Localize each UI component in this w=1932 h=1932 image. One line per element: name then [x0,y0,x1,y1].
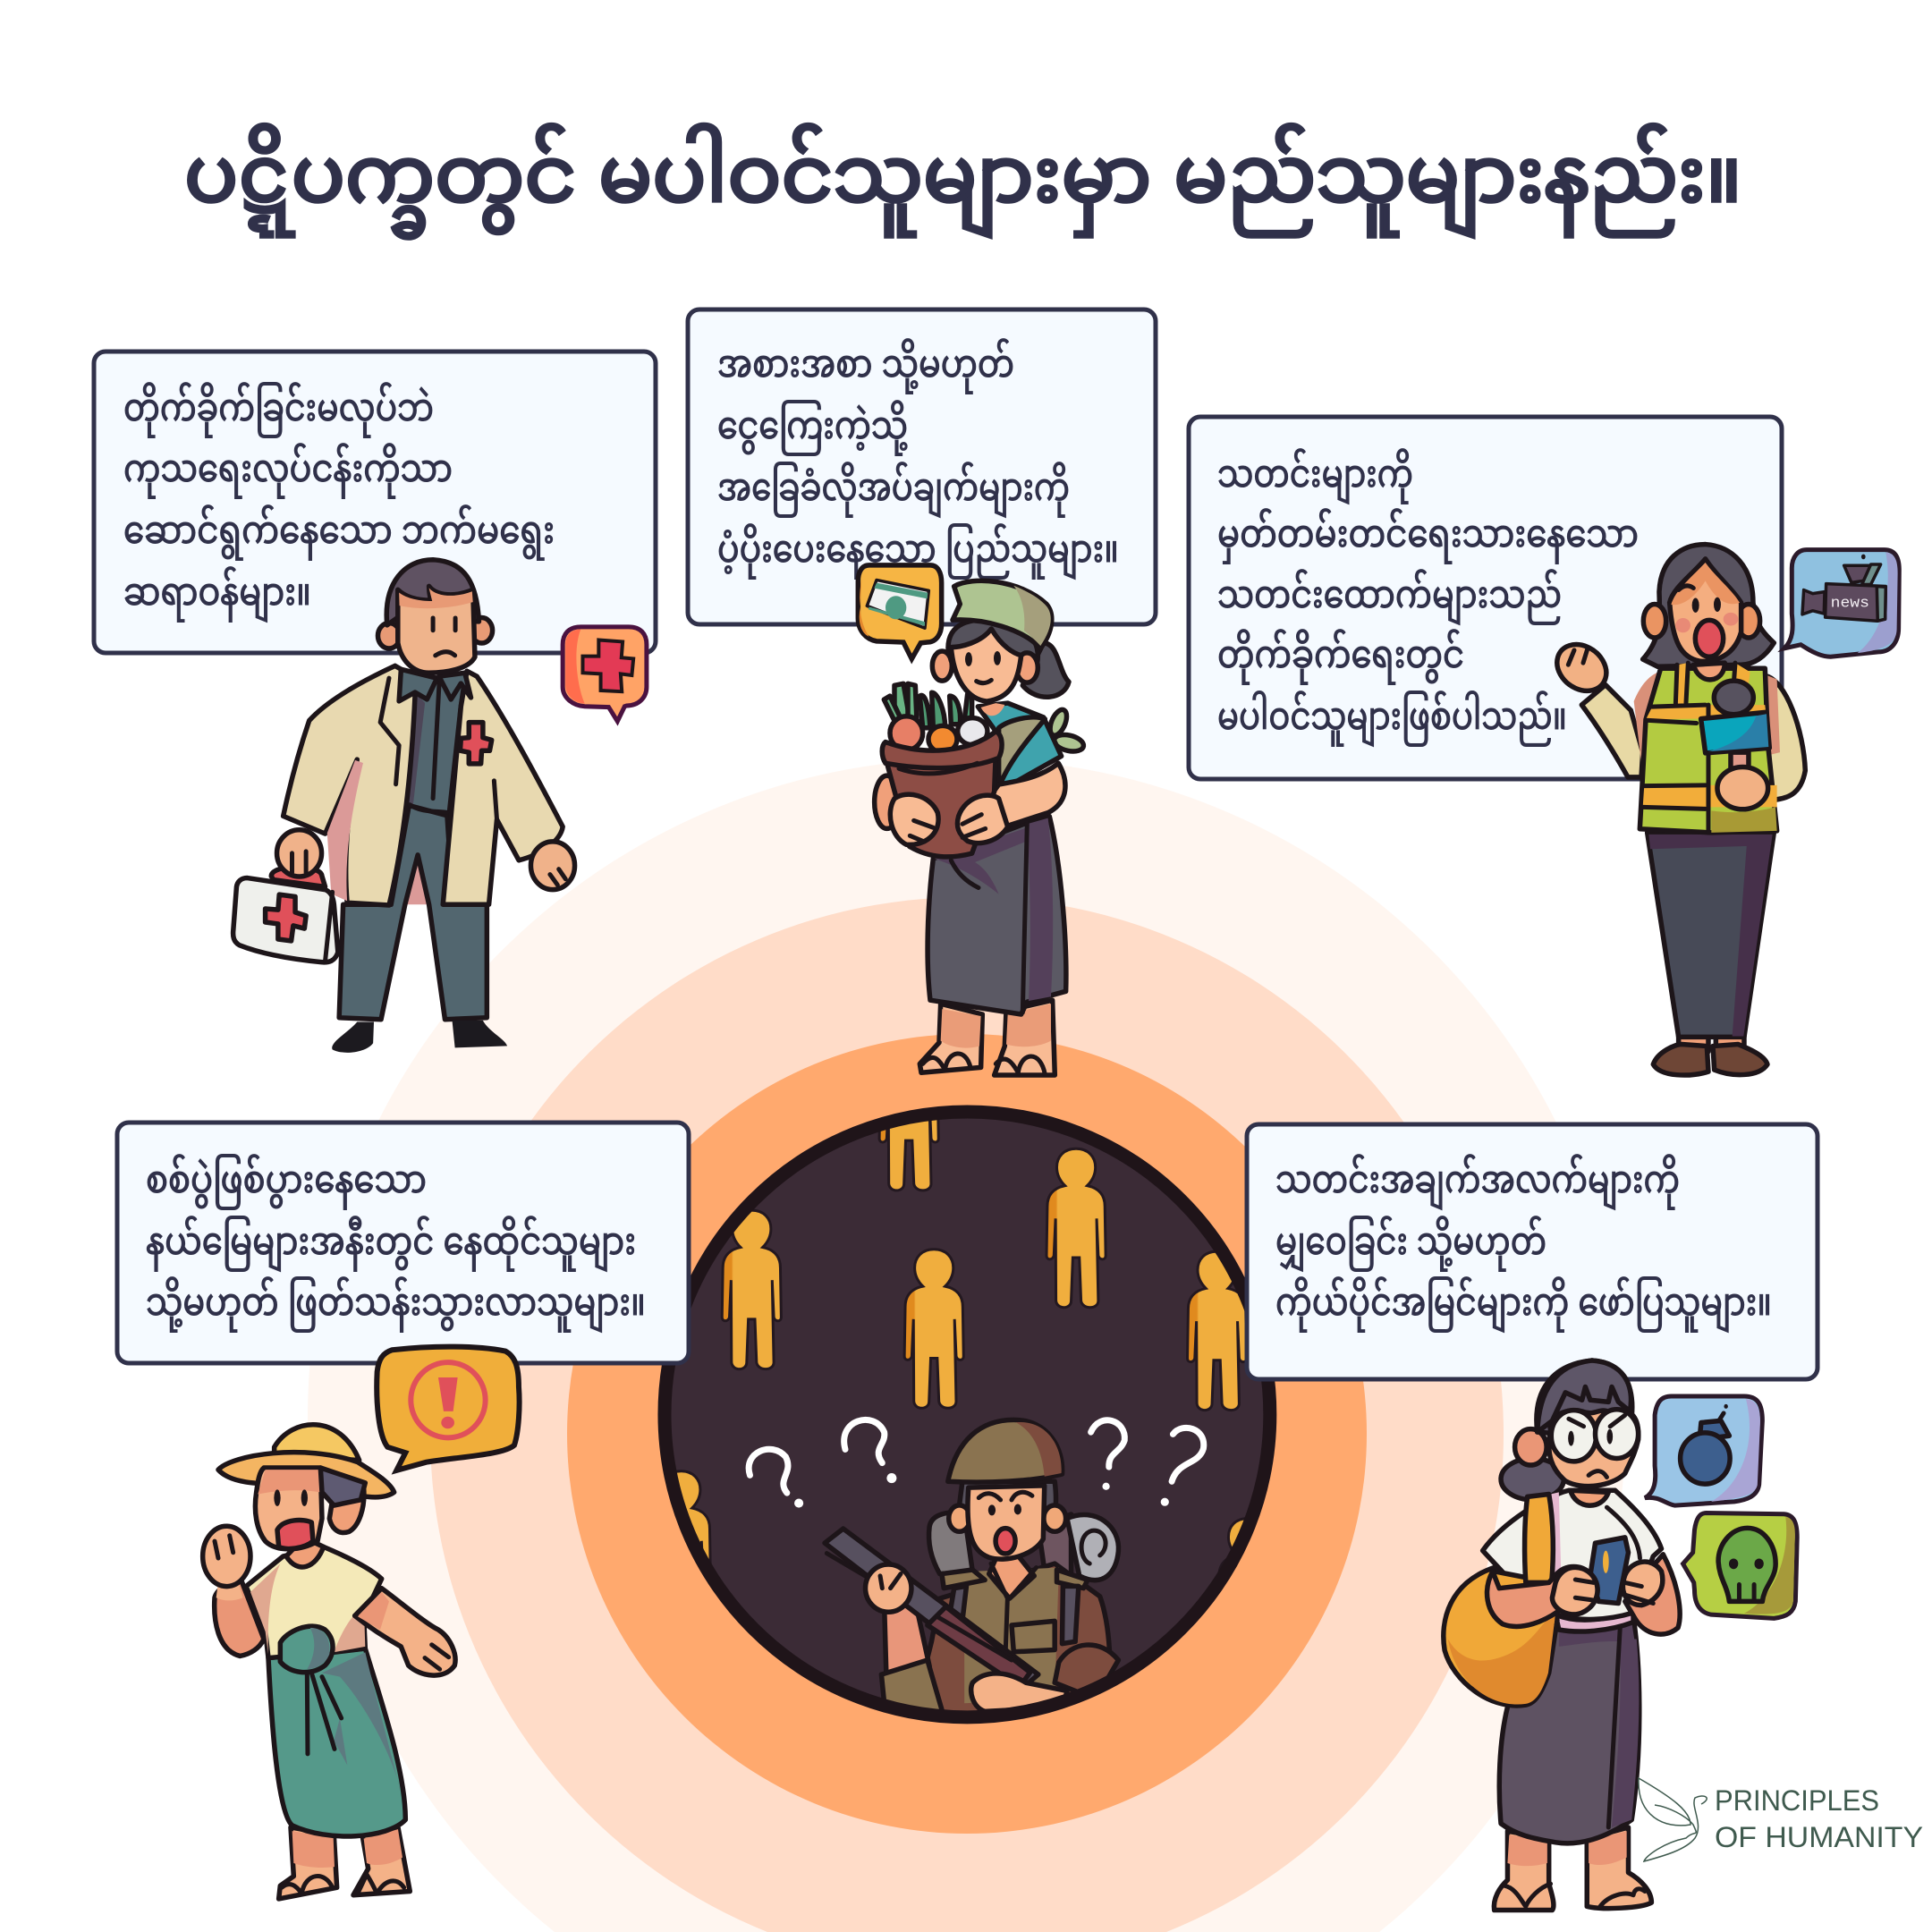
panel: journalist text [1189,417,1782,779]
soldier [825,1419,1119,1724]
panel: doctor text: ဆရာဝန်များ။ [123,567,311,623]
panel: civilian text: စစ်ပွဲဖြစ်ပွားနေသော [146,1155,427,1210]
icon: news camera bubble [1784,550,1899,657]
logo: Principles of Humanity: OF HUMANITY [1715,1821,1923,1853]
icon: medical cross bubble [563,627,647,721]
title: ပဋ္ဋိပက္ခတွင် မပါဝင်သူများမှာ မည်သူများနည်း။ [184,124,1742,239]
character: food provider [858,565,1085,1075]
logo: Principles of Humanity: PRINCIPLES [1715,1784,1879,1817]
background concentric circles [308,758,1626,1932]
icon: dove outline [1639,1778,1707,1861]
panel: journalist text: သတင်းထောက်များသည် [1217,570,1562,625]
panel: information sharers text [1247,1124,1818,1379]
panel: doctor text: တိုက်ခိုက်ခြင်းမလုပ်ဘဲ [123,383,434,438]
panel: information sharers text: မျှဝေခြင်း သို့မဟုတ် [1275,1216,1546,1272]
panel: doctor text: ကုသရေးလုပ်ငန်းကိုသာ [123,444,453,499]
icon: warning bubble [377,1347,520,1470]
logo: Principles of Humanity [1639,1778,1923,1861]
panel: civilian text: သို့မဟုတ် ဖြတ်သန်းသွားလာသူများ။ [146,1277,646,1333]
character: doctor [233,560,575,1053]
panel: journalist text: သတင်းများကို [1217,449,1413,504]
panel: provider text: ပံ့ပိုးပေးနေသော ပြည်သူများ။ [717,524,1119,580]
character: woman with phone [1444,1360,1797,1911]
panel: information sharers text: သတင်းအချက်အလက်များကို [1275,1155,1680,1210]
panel: doctor text [94,352,656,653]
character: journalist [1552,545,1899,1075]
panel: provider text [688,309,1156,624]
panel: journalist text: တိုက်ခိုက်ရေးတွင် [1217,630,1464,685]
icon: news camera bubble: news [1831,597,1869,612]
panel: journalist text: မပါဝင်သူများဖြစ်ပါသည်။ [1217,691,1567,747]
panel: provider text: ငွေကြေးကဲ့သို့ [717,401,908,456]
panel: provider text: အခြေခံလိုအပ်ချက်များကို [717,462,1070,518]
character: civilian with hat [203,1347,520,1899]
icon: skull bubble [1683,1513,1797,1618]
panel: information sharers text: ကိုယ်ပိုင်အမြင်များကို ဖော်ပြသူများ။ [1275,1277,1772,1333]
panel: provider text: အစားအစာ သို့မဟုတ် [717,339,1014,394]
panel: civilian text: နယ်မြေများအနီးတွင် နေထိုင်သူများ [146,1216,636,1272]
civilian silhouettes [651,1031,1277,1677]
panel: civilian text [117,1123,689,1363]
panel: doctor text: ဆောင်ရွက်နေသော ဘက်မရွေး [123,505,555,561]
icon: bomb bubble [1645,1396,1762,1505]
icon: money bubble [858,565,942,659]
question marks [749,1419,1204,1508]
central circle: soldier among civilians [657,1106,1277,1724]
panel: journalist text: မှတ်တမ်းတင်ရေးသားနေသော [1217,509,1639,564]
